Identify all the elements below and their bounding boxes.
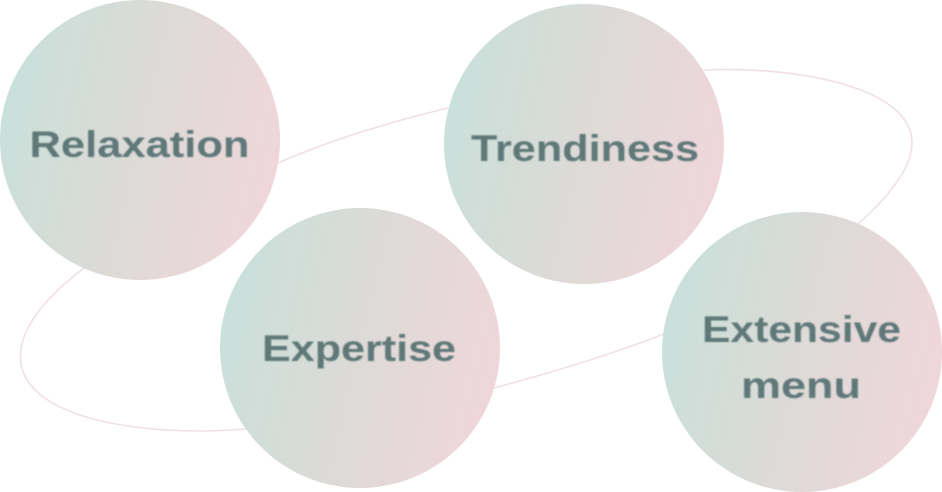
circle: Expertise: Expertise — [262, 328, 456, 369]
circle: Expertise — [220, 208, 500, 488]
circle: Relaxation — [0, 0, 280, 280]
circle: Extensive menu: Extensive — [702, 309, 901, 350]
connecting loop line — [20, 69, 912, 431]
circle: Relaxation: Relaxation — [30, 124, 250, 165]
circle: Extensive menu — [662, 212, 942, 492]
circle: Trendiness: Trendiness — [471, 128, 699, 169]
circle: Extensive menu: menu — [741, 365, 861, 406]
circle: Trendiness — [444, 4, 724, 284]
